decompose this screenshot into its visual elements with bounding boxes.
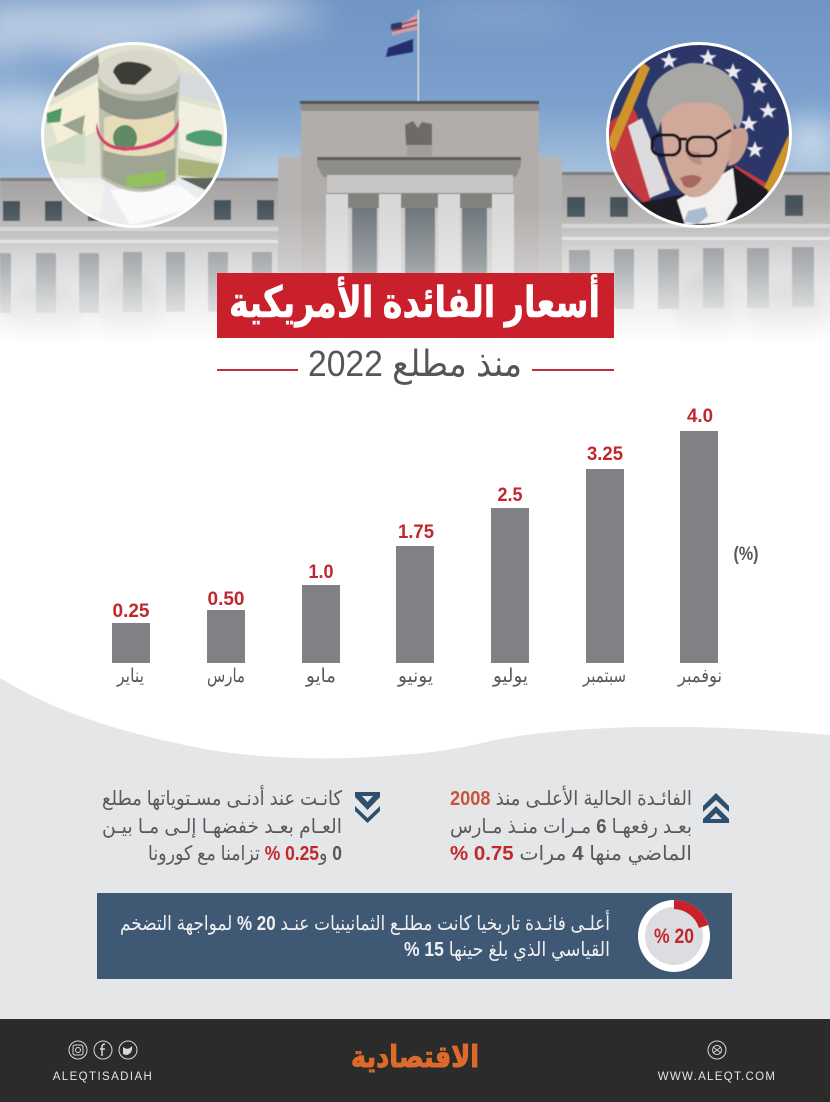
- panel: historic high rate: [97, 893, 732, 979]
- month labels: سبتمبر: [582, 666, 626, 687]
- note: current rate: [450, 786, 729, 866]
- logo: الاقتصادية: [351, 1041, 479, 1074]
- icon: website: [708, 1041, 726, 1059]
- website: WWW.ALEQT.COM: [658, 1071, 776, 1083]
- note: lowest rate: كانـت عند أدنـى مسـتوياتها مطلع: [102, 785, 342, 810]
- value labels: 2.5: [498, 485, 523, 506]
- bars: [112, 431, 718, 663]
- note: lowest rate: [102, 785, 380, 865]
- note: current rate: الفائـدة الحالية الأعلـى منذ 2008: [450, 786, 692, 810]
- note: lowest rate: العـام بعـد خفضهـا إلـى مـا بيـن: [102, 816, 342, 839]
- donut: 20 percent: [638, 900, 710, 972]
- hero photo: Federal Reserve building and sky: [0, 0, 830, 350]
- value labels: 0.50: [208, 589, 244, 610]
- month labels: مايو: [305, 666, 336, 687]
- photo circle: Jerome Powell: [600, 40, 795, 235]
- icon: double chevron down: [355, 792, 380, 823]
- left wing: [0, 177, 278, 314]
- note: current rate: بعـد رفعهـا 6 مـرات منـذ مـارس: [450, 816, 692, 838]
- month labels: يناير: [116, 666, 144, 687]
- title banner: [217, 273, 614, 338]
- note: lowest rate: 0 و0.25 % تزامنا مع كورونا: [148, 843, 342, 865]
- wave background: [0, 678, 830, 1019]
- panel: historic high rate: أعلـى فائـدة تاريخيا كانت مطلـع الثمانينيات عنـد 20 % لمواجهة التضخم: [120, 910, 610, 935]
- bar chart: [112, 406, 758, 687]
- suit: [639, 166, 769, 225]
- footer: [0, 1019, 830, 1102]
- value labels: 3.25: [587, 444, 623, 465]
- month labels: يونيو: [397, 666, 433, 687]
- value labels: 4.0: [687, 406, 713, 427]
- subtitle: منذ مطلع 2022: [308, 343, 522, 385]
- value labels: 1.75: [398, 522, 434, 543]
- month labels: [116, 666, 722, 687]
- month labels: يوليو: [492, 666, 528, 687]
- flagpole and flags: [386, 10, 419, 102]
- pediment: [317, 158, 521, 177]
- trees: [14, 277, 816, 313]
- icon: double chevron up: [703, 793, 729, 823]
- right wing: [562, 171, 830, 310]
- value labels: 0.25: [112, 601, 150, 622]
- unit label: (%): [734, 544, 758, 565]
- head: [660, 102, 734, 198]
- month labels: نوفمبر: [677, 666, 722, 687]
- value labels: [112, 406, 713, 622]
- donut: 20 percent: 20 %: [654, 925, 694, 948]
- panel: historic high rate: القياسي الذي بلغ حينها 15 %: [404, 939, 610, 962]
- value labels: 1.0: [308, 562, 334, 583]
- note: current rate: الماضي منها 4 مرات 0.75 %: [450, 843, 692, 866]
- social icons: [69, 1041, 137, 1059]
- central block: [278, 100, 562, 273]
- money roll: [96, 50, 180, 192]
- month labels: مارس: [207, 666, 245, 687]
- eagle: [405, 121, 432, 145]
- title banner: أسعار الفائدة الأمريكية: [229, 274, 600, 328]
- social handle: ALEQTISADIAH: [53, 1071, 153, 1083]
- photo circle: roll of dollars: [40, 40, 230, 230]
